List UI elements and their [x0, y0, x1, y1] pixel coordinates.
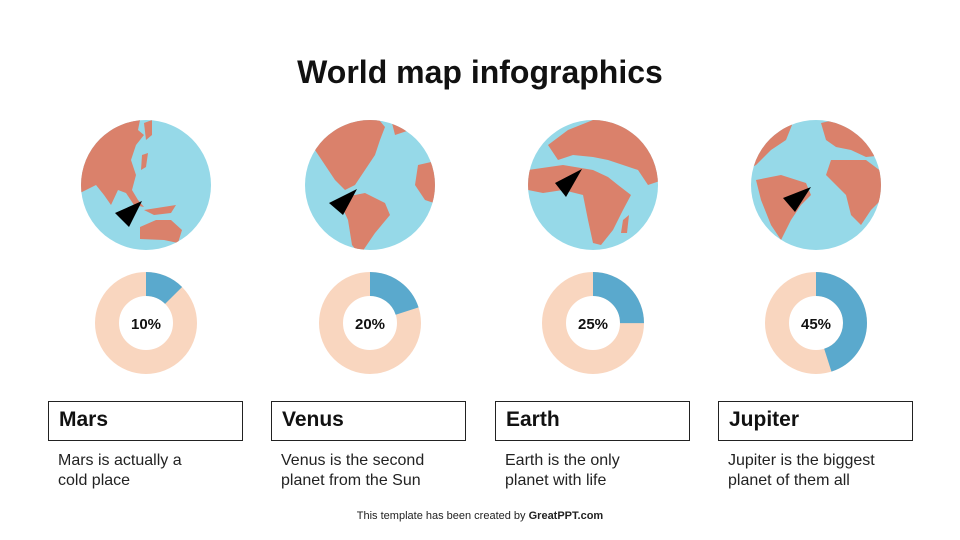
globe: Atlantic — [751, 120, 881, 250]
text: Earth: planet with life — [505, 472, 606, 488]
globe: Asia — [76, 115, 211, 250]
donut 20%: 20% — [355, 316, 385, 333]
donut 25% — [554, 284, 632, 362]
text: Jupiter: planet of them all — [728, 472, 850, 488]
donut 20% — [331, 284, 409, 362]
text: Mars: Mars is actually a — [58, 452, 182, 469]
arrow — [329, 189, 357, 215]
label: Venus: Venus — [282, 408, 344, 431]
text: Venus: Venus is the second — [281, 452, 424, 469]
text: Earth: Earth is the only — [505, 452, 620, 469]
arrow — [555, 169, 582, 197]
label: Jupiter — [718, 401, 913, 441]
label: Earth: Earth — [506, 408, 560, 431]
label: Jupiter: Jupiter — [729, 408, 799, 431]
label: Mars: Mars — [59, 408, 108, 431]
title: World map infographics — [297, 54, 663, 90]
donut 25%: 25% — [578, 316, 608, 333]
text: Earth — [505, 452, 620, 488]
donut 10%: 10% — [131, 316, 161, 333]
footer: This template has been created by GreatPPT.com — [357, 510, 603, 522]
label: Venus — [271, 401, 466, 441]
text: Jupiter — [728, 452, 875, 488]
donut 45% — [777, 284, 855, 362]
label: Mars — [48, 401, 243, 441]
text: Venus: planet from the Sun — [281, 472, 421, 488]
globe: Americas — [305, 120, 435, 250]
arrow — [115, 201, 142, 227]
donut 45%: 45% — [801, 316, 831, 333]
text: Venus — [281, 452, 424, 488]
globes and donuts — [81, 120, 881, 374]
label: Earth — [495, 401, 690, 441]
arrow — [783, 187, 811, 212]
text: Jupiter: Jupiter is the biggest — [728, 452, 875, 469]
donut 10% — [107, 284, 185, 362]
text: Mars: cold place — [58, 472, 130, 488]
globe: Africa/Europe — [528, 115, 663, 250]
text: Mars — [58, 452, 182, 488]
